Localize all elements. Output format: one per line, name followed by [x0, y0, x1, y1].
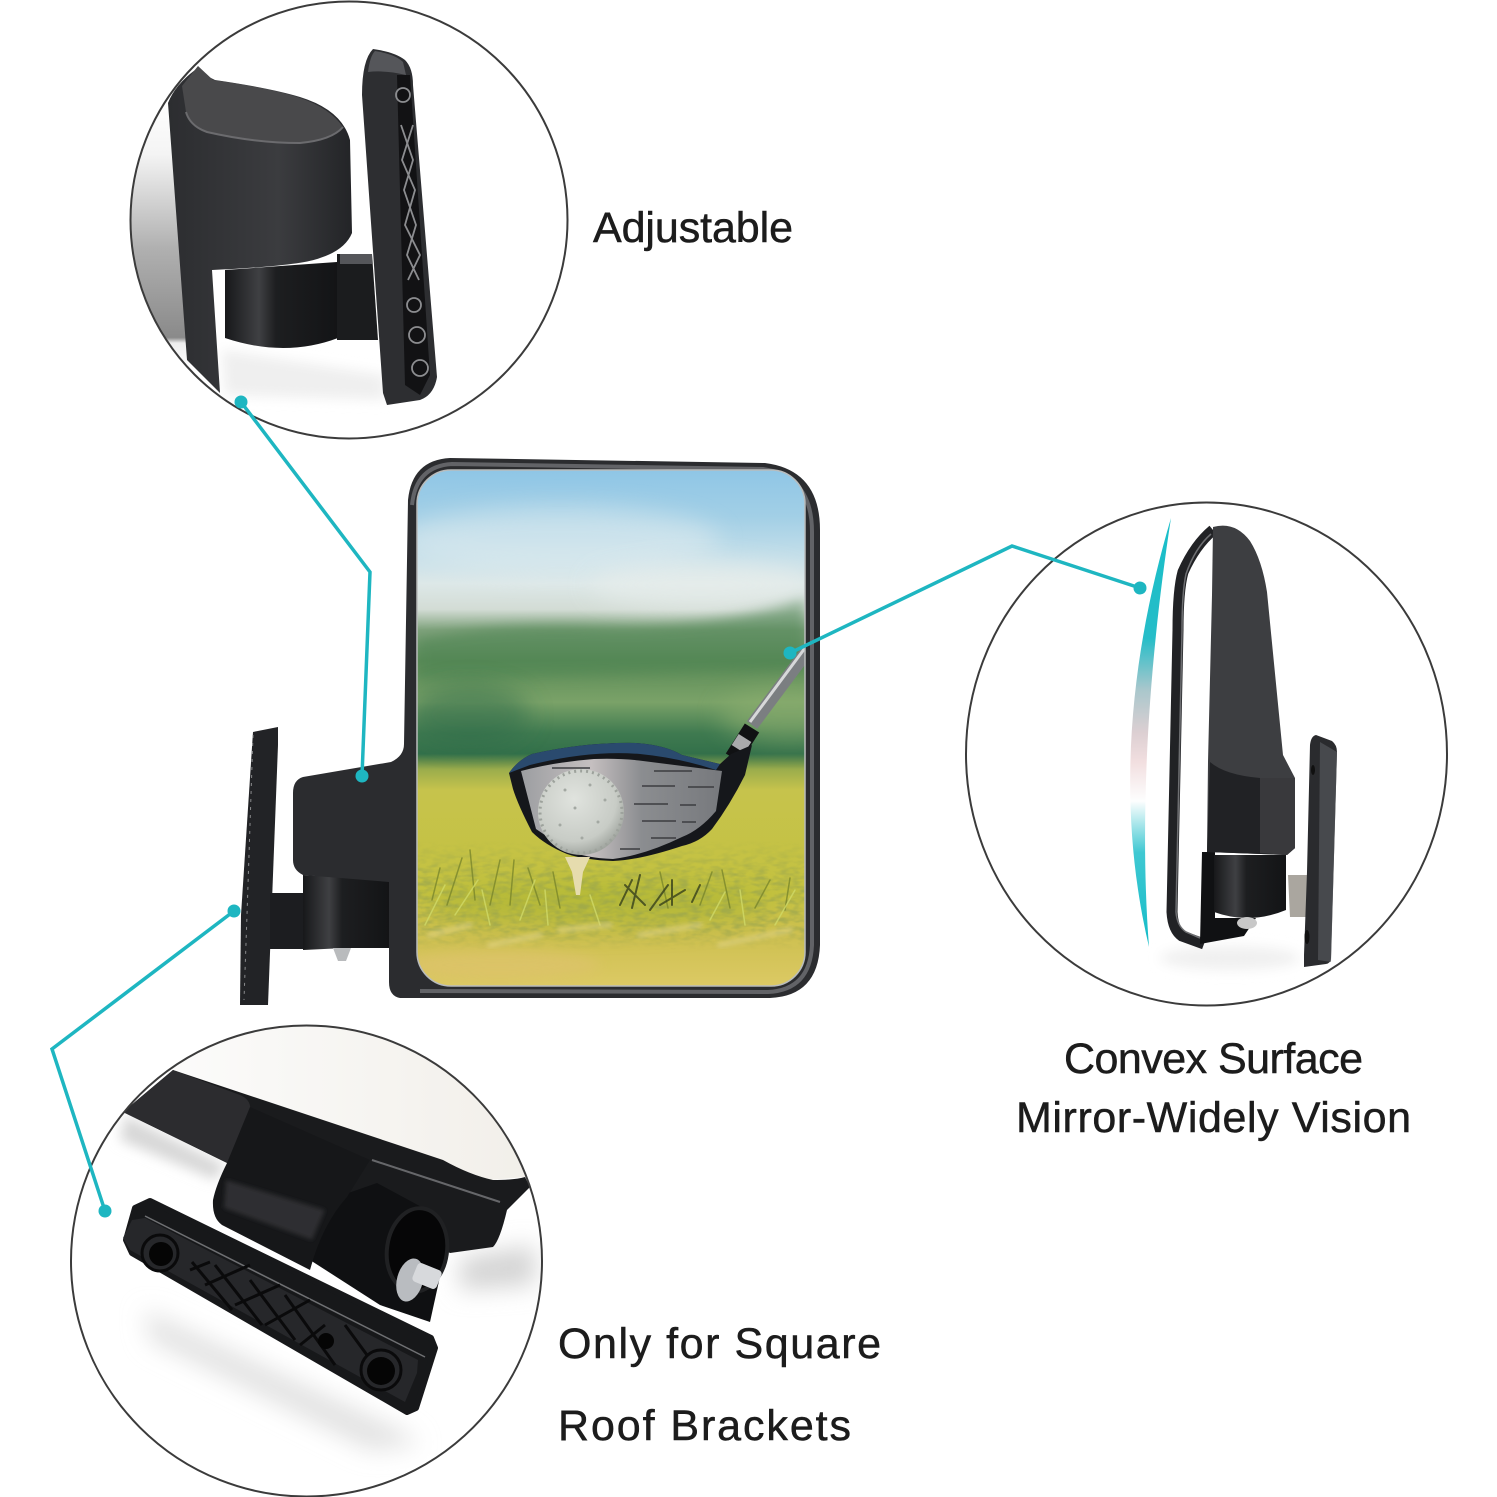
label: square roof brackets: Roof Brackets	[558, 1402, 851, 1450]
bracket arm	[270, 893, 306, 949]
label: convex surface mirror: Mirror-Widely Vision	[1016, 1094, 1411, 1142]
grass blades	[425, 850, 795, 945]
club face	[521, 759, 722, 859]
bolt	[1237, 917, 1257, 929]
bolt	[333, 948, 351, 961]
mirror glass scene	[418, 470, 804, 986]
metal arm	[1288, 875, 1307, 917]
convex arc	[1130, 518, 1171, 947]
plate holes	[142, 1235, 401, 1390]
label: square roof brackets: Only for Square	[558, 1320, 881, 1368]
plate shadow	[145, 1310, 420, 1450]
club shaft	[752, 650, 808, 725]
mirror housing shell	[1207, 526, 1295, 855]
clouds	[400, 506, 720, 574]
connector: adjustable callout	[234, 396, 370, 782]
connector: roof bracket callout	[52, 904, 240, 1218]
label: convex surface mirror	[1016, 1035, 1411, 1142]
fairway glow	[430, 881, 770, 929]
circle outline	[966, 502, 1447, 1006]
plate lattice edge	[397, 75, 430, 395]
bracket arm	[337, 254, 378, 340]
mirror frame profile	[1172, 530, 1213, 944]
distant hills	[417, 600, 805, 680]
pivot cylinder	[303, 875, 390, 950]
shadow under joint	[222, 350, 385, 400]
housing saddle	[212, 1107, 335, 1270]
golf tee	[565, 857, 590, 895]
mirror housing body	[168, 70, 352, 393]
plate face	[123, 1218, 418, 1402]
glass rim	[417, 470, 805, 986]
circle outline	[71, 1026, 542, 1496]
panel: convex surface detail circle	[966, 502, 1447, 1006]
main mirror product	[240, 458, 860, 1005]
mirror frame and housing	[293, 458, 820, 998]
panel: roof bracket detail circle	[71, 1000, 560, 1496]
plate lattice	[190, 1262, 378, 1370]
golf club	[509, 648, 808, 861]
mirror frame	[123, 1070, 530, 1253]
mounting plate	[126, 1201, 435, 1412]
mounting plate side	[362, 49, 437, 405]
label: square roof brackets	[558, 1320, 881, 1450]
lower bracket	[1200, 852, 1256, 944]
pivot cylinder	[310, 1183, 448, 1322]
club ferrule	[733, 728, 752, 758]
mounting plate	[240, 727, 278, 1005]
pivot cylinder	[1214, 855, 1286, 918]
panel: adjustable detail circle	[130, 2, 568, 438]
grass speckle	[418, 850, 804, 944]
label: convex surface mirror: Convex Surface	[1064, 1035, 1363, 1083]
bolt and nut	[396, 1258, 442, 1302]
label: adjustable: Adjustable	[593, 204, 793, 252]
mounting plate	[1304, 735, 1337, 967]
connector: convex surface callout	[784, 546, 1146, 660]
club head	[509, 743, 752, 861]
pivot cylinder	[225, 262, 338, 348]
glass back	[247, 1026, 526, 1180]
soft shadow	[1168, 947, 1292, 969]
circle outline	[130, 2, 568, 438]
housing top surface	[182, 66, 343, 143]
golf ball	[538, 769, 624, 855]
